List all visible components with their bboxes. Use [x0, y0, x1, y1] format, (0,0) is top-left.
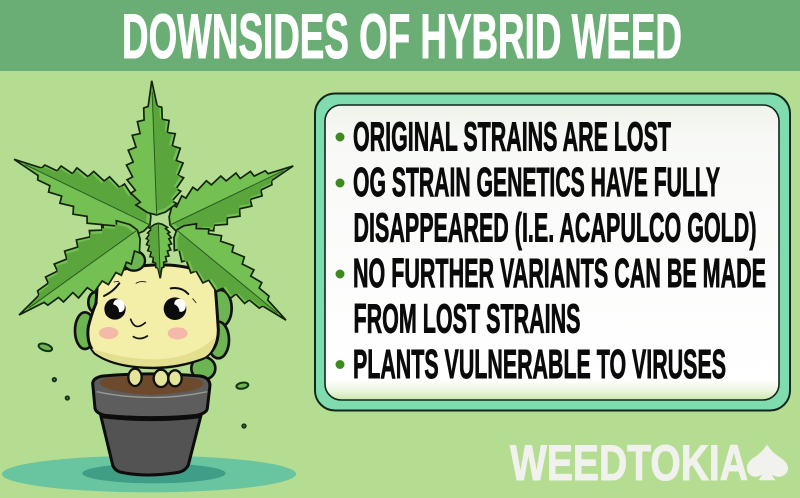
panel inner [325, 105, 779, 400]
green lumps behind head [75, 290, 232, 380]
pot body [101, 417, 201, 475]
leaf: top [123, 80, 185, 216]
leaf: lower right [161, 211, 301, 339]
panel frame [315, 94, 790, 410]
bullets [336, 132, 344, 369]
top bud [123, 251, 145, 271]
ground shadow [2, 456, 296, 492]
falling leaf specks [38, 342, 249, 428]
list text [353, 114, 766, 387]
right eye [164, 297, 188, 320]
head shading [92, 337, 216, 367]
illustration: sad cannabis plant in pot [2, 80, 304, 492]
panel: downsides list [315, 94, 790, 410]
pot rim and soil [93, 374, 210, 418]
title banner [0, 0, 800, 72]
hands [128, 369, 182, 387]
leaf: small centre [146, 223, 173, 279]
brows, nose and mouth [104, 281, 196, 339]
leaf: upper left [3, 136, 161, 248]
leaf: upper right [160, 144, 304, 247]
head [88, 265, 218, 368]
leaves [3, 80, 304, 339]
list text: FROM LOST STRAINS [354, 296, 580, 342]
cheeks [99, 327, 118, 339]
leaf: lower left [3, 208, 153, 337]
face [99, 281, 196, 339]
icon: spade [747, 445, 788, 480]
left eye [104, 297, 127, 320]
